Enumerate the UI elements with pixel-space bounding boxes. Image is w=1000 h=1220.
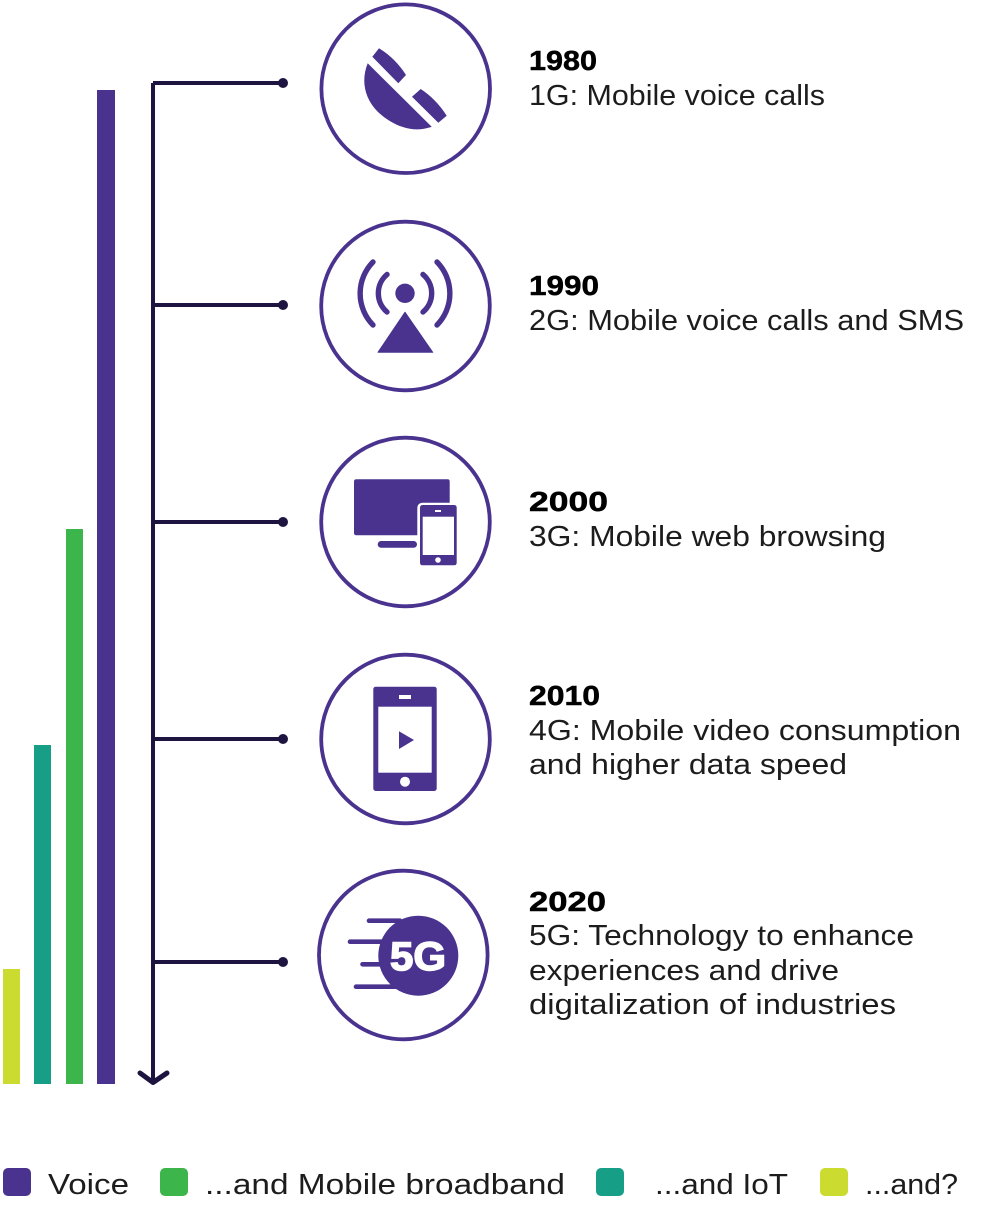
text: 2020 <box>529 886 914 1021</box>
bar: and? <box>3 969 20 1084</box>
legend: IoT <box>596 1168 788 1201</box>
text: 1980 <box>529 45 825 112</box>
text: 1990: 1990 <box>529 270 599 301</box>
text: 2010 <box>529 680 961 781</box>
text: 1990 <box>529 270 964 337</box>
text: 1980: 1G: Mobile voice calls <box>529 80 825 112</box>
text: 2000: 2000 <box>529 486 608 517</box>
legend: IoT: ...and IoT <box>655 1169 788 1201</box>
legend: and?: ...and? <box>865 1169 958 1201</box>
timeline arrow <box>140 78 288 1082</box>
text: 1980: 1980 <box>529 45 597 76</box>
icon: 5G: 5G <box>390 935 446 979</box>
legend <box>3 1168 958 1201</box>
text: 2020: 5G: Technology to enhance <box>529 920 914 952</box>
text: 2000 <box>529 486 886 553</box>
text: 1990: 2G: Mobile voice calls and SMS <box>529 305 964 337</box>
text: 2000: 3G: Mobile web browsing <box>529 521 886 553</box>
text: 2020: experiences and drive <box>529 955 839 987</box>
text: 2010: 4G: Mobile video consumption <box>529 715 961 747</box>
icon: monitor and phone <box>321 438 490 606</box>
bar: and IoT <box>34 745 51 1084</box>
legend: Mobile broadband: ...and Mobile broadband <box>205 1169 565 1201</box>
legend: Voice <box>3 1168 129 1201</box>
icon: phone call <box>321 4 490 173</box>
legend: and? <box>820 1168 958 1201</box>
legend: Voice: Voice <box>48 1169 129 1201</box>
bar: and Mobile broadband <box>66 529 83 1084</box>
icon: phone video <box>321 655 490 823</box>
bar chart <box>3 90 115 1084</box>
text: 2020: 2020 <box>529 886 606 917</box>
text: 2020: digitalization of industries <box>529 989 896 1021</box>
bar: Voice <box>97 90 115 1084</box>
icon: antenna <box>321 222 490 390</box>
text: 2010: 2010 <box>529 680 600 711</box>
icon: 5G <box>319 871 488 1039</box>
text: 2010: and higher data speed <box>529 749 847 781</box>
